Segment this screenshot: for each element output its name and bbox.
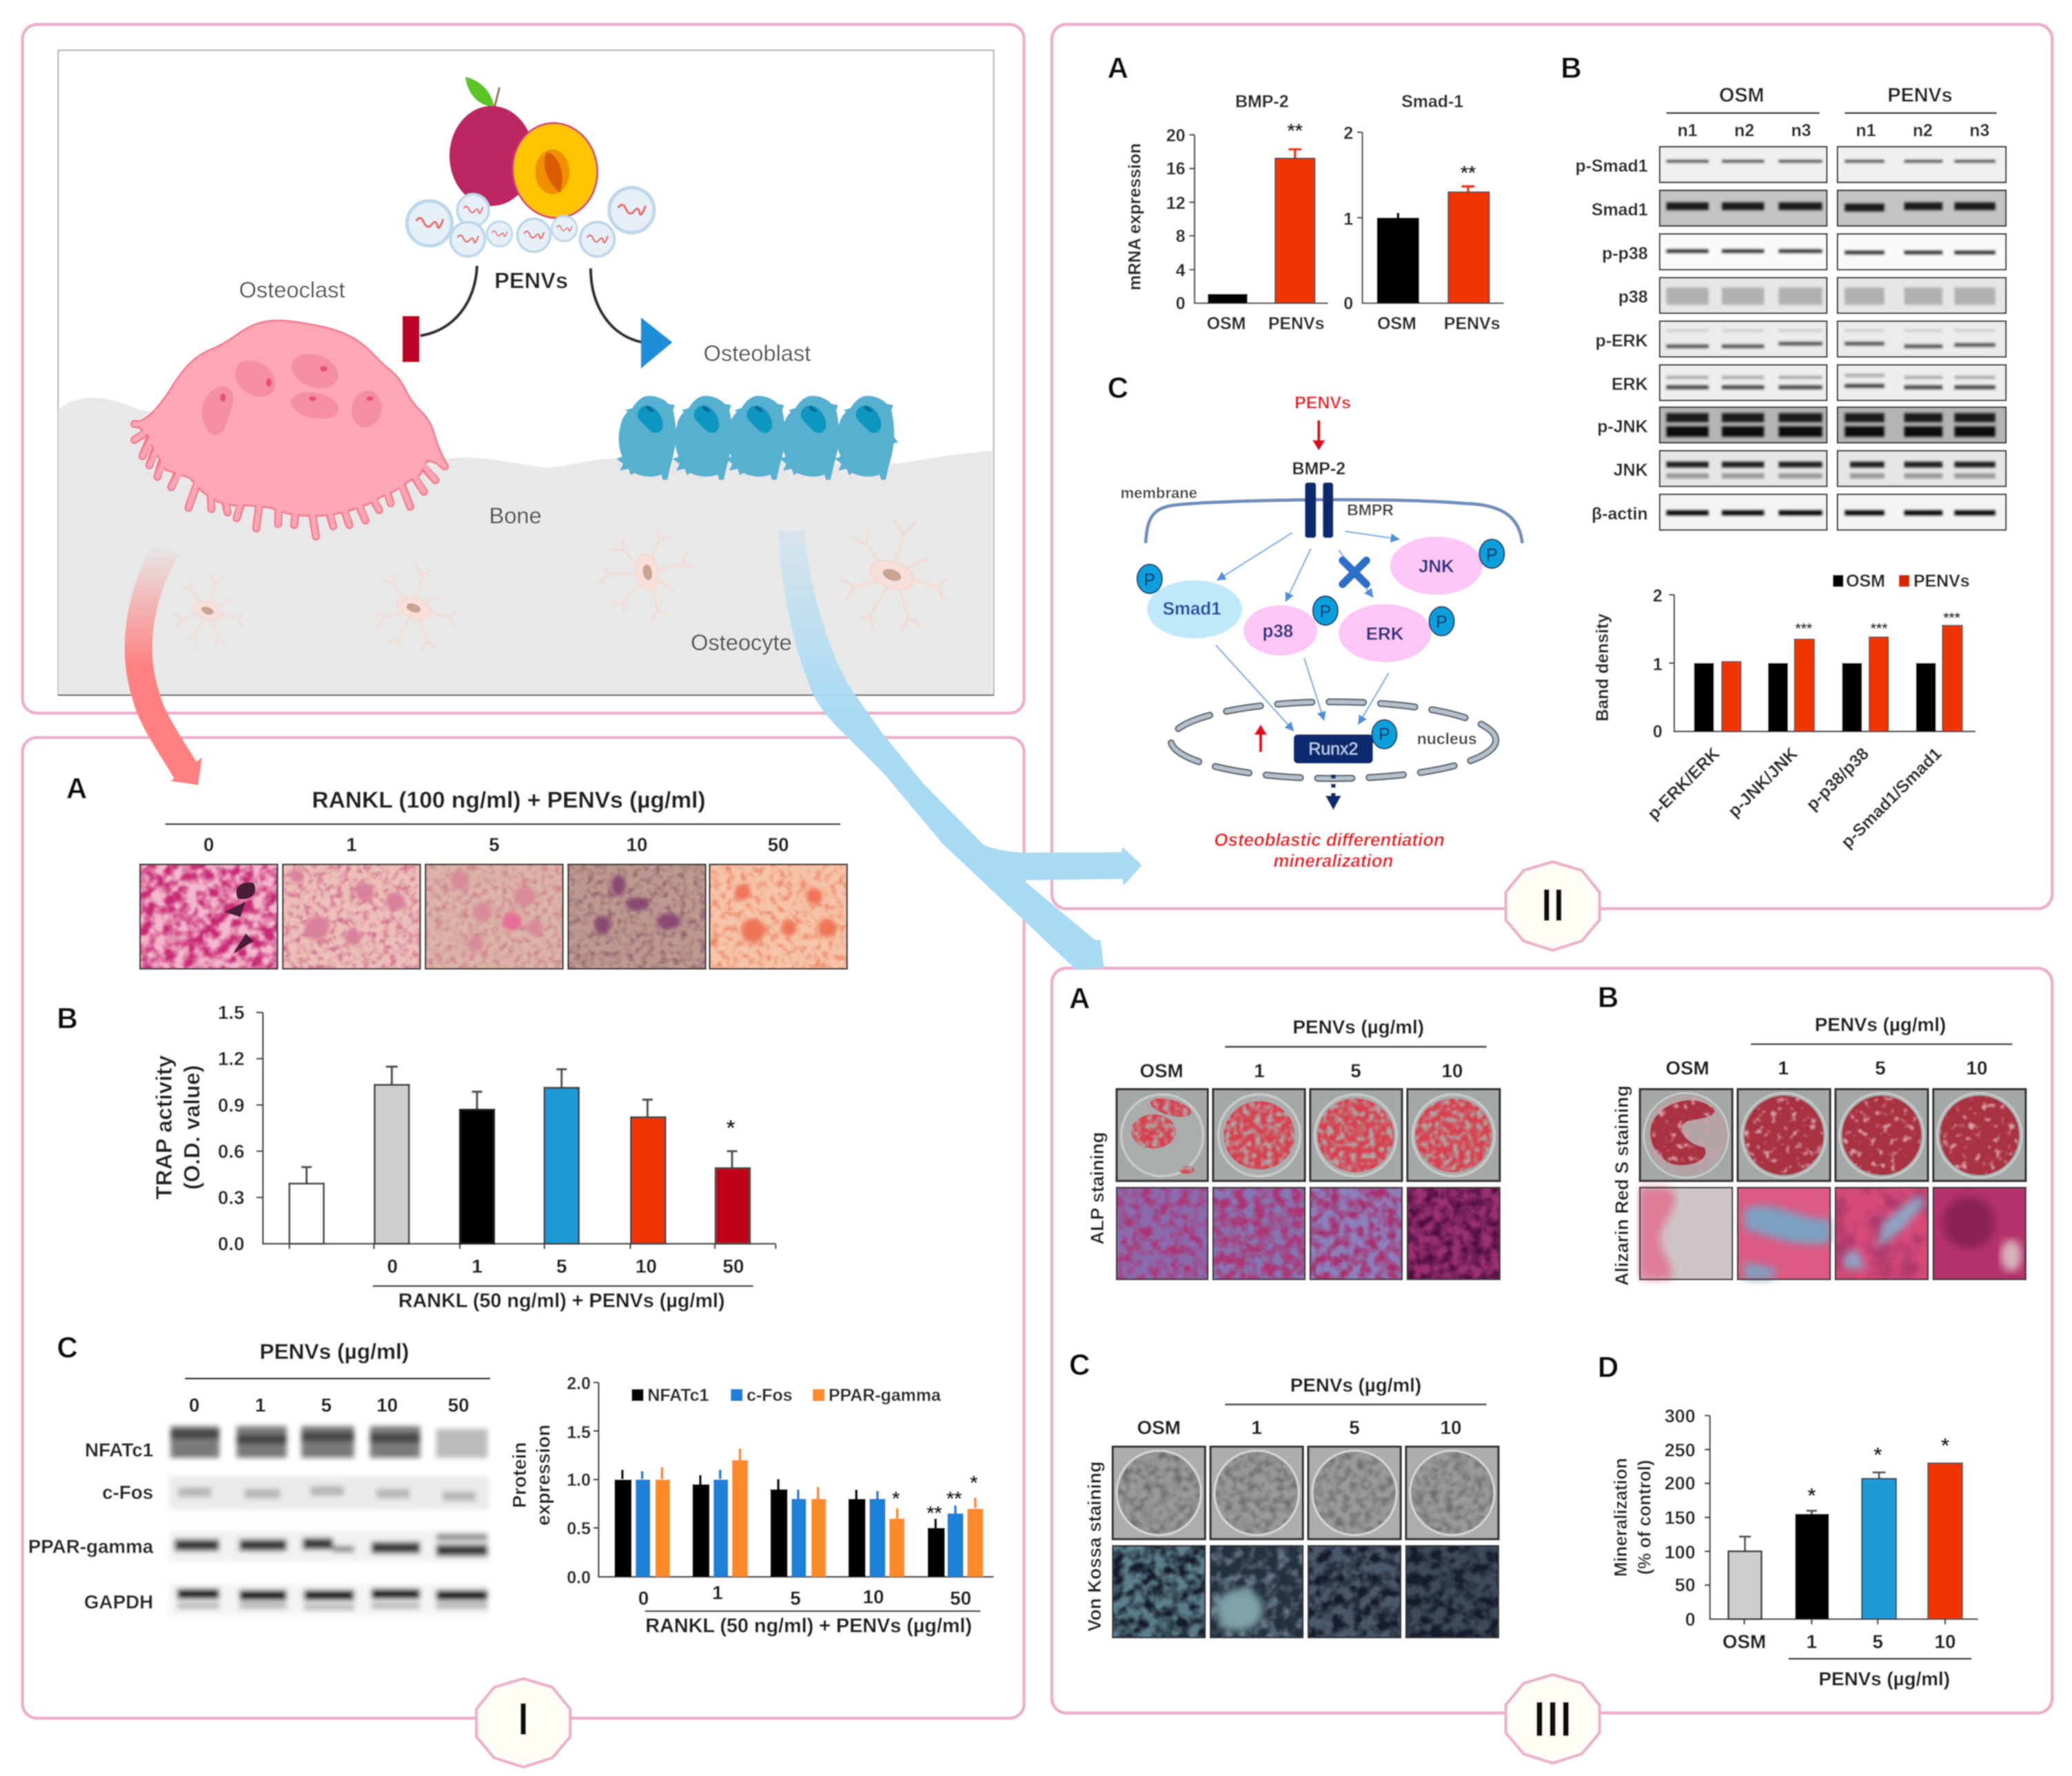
bar chart: band density xyxy=(1593,572,1975,852)
bar chart: Smad-1 mRNA: 0 xyxy=(1343,294,1353,314)
western blot: osteoclast markers: PPAR-gamma xyxy=(28,1536,154,1557)
icon: osteocytes xyxy=(174,514,946,651)
node: p38: P xyxy=(1320,602,1331,621)
bar chart: protein expression: 50 xyxy=(950,1587,971,1608)
western blot: osteoclast markers xyxy=(28,1339,490,1615)
Von Kossa staining: OSM xyxy=(1137,1417,1181,1438)
western blot: signalling proteins: ERK xyxy=(1612,375,1648,394)
node: JNK: JNK xyxy=(1419,557,1454,576)
panel I: osteoclast results xyxy=(23,738,1024,1767)
Von Kossa staining: 10 xyxy=(1441,1417,1461,1438)
western blot: signalling proteins: p-JNK xyxy=(1597,417,1648,436)
western blot: signalling proteins: p-ERK xyxy=(1596,331,1648,350)
TRAP activity bar chart: 0.6 xyxy=(218,1140,245,1162)
bar chart: mineralization: 50 xyxy=(1675,1575,1696,1595)
TRAP activity bar chart: 10 xyxy=(636,1255,657,1277)
TRAP staining heading: RANKL (100 ng/ml) + PENVs (µg/ml) xyxy=(312,787,706,813)
bar chart: band density: p-JNK/JNK xyxy=(1725,744,1801,821)
badge I: I xyxy=(517,1695,529,1744)
scene labels xyxy=(239,268,811,655)
bar chart: mineralization: OSM xyxy=(1723,1631,1766,1653)
PENVs input xyxy=(1294,393,1351,451)
western blot: signalling proteins xyxy=(1575,85,2006,530)
western blot: signalling proteins: p-Smad1 xyxy=(1575,157,1648,176)
Von Kossa staining: PENVs (µg/ml) xyxy=(1290,1375,1421,1396)
western blot: signalling proteins: n3 xyxy=(1969,121,1989,140)
dose labels: 1 xyxy=(346,834,357,856)
TRAP activity bar chart: 5 xyxy=(556,1255,567,1277)
western blot: signalling proteins: OSM xyxy=(1719,85,1764,107)
TRAP activity bar chart: 0.3 xyxy=(218,1187,245,1208)
blocked ERK marker xyxy=(1343,561,1366,584)
ALP staining: 10 xyxy=(1441,1060,1463,1081)
bar chart: Smad-1 mRNA: PENVs xyxy=(1444,314,1500,333)
TRAP activity bar chart: 0.0 xyxy=(218,1233,245,1255)
badge III xyxy=(1506,1675,1600,1763)
TRAP activity bar chart: 0 xyxy=(387,1255,398,1277)
activation arrow to osteoblast xyxy=(591,268,673,369)
node: Smad1: Smad1 xyxy=(1163,599,1221,618)
dose labels: 50 xyxy=(768,834,789,856)
TRAP activity bar chart xyxy=(151,1002,775,1312)
bar chart: band density: *** xyxy=(1943,610,1961,626)
nucleus envelope xyxy=(1171,702,1496,778)
cell membrane: membrane xyxy=(1121,485,1197,502)
label C: C xyxy=(1108,372,1128,404)
TRAP activity bar chart: 0.9 xyxy=(218,1094,245,1116)
Alizarin Red S staining: 5 xyxy=(1875,1058,1886,1079)
western blot: signalling proteins: p-p38 xyxy=(1602,244,1648,263)
bar chart: band density: p-ERK/ERK xyxy=(1644,744,1723,824)
bar chart: band density: 0 xyxy=(1653,723,1663,742)
bar chart: protein expression: Protein xyxy=(509,1442,530,1508)
ALP staining: 5 xyxy=(1350,1060,1361,1081)
badge I xyxy=(476,1679,570,1767)
western blot: signalling proteins: n2 xyxy=(1913,121,1933,140)
bone xyxy=(58,398,993,695)
dotted output arrow xyxy=(1326,774,1341,810)
panel II: osteoblast signalling xyxy=(1052,24,2052,950)
badge III: III xyxy=(1533,1693,1572,1746)
bar chart: BMP-2 mRNA: 4 xyxy=(1176,261,1186,281)
TRAP activity bar chart: 1 xyxy=(471,1255,483,1277)
Von Kossa staining: 1 xyxy=(1251,1417,1262,1438)
bar chart: protein expression: ** xyxy=(946,1489,962,1511)
western blot: signalling proteins: n3 xyxy=(1791,121,1811,140)
legend: PPAR-gamma xyxy=(829,1386,942,1405)
Von Kossa staining: 5 xyxy=(1349,1417,1360,1438)
label A: A xyxy=(1108,52,1128,84)
bar chart: protein expression: * xyxy=(970,1473,978,1495)
Runx2 box: Runx2 xyxy=(1308,740,1358,759)
scene labels: Osteoblast xyxy=(704,340,811,365)
bar chart: Smad-1 mRNA: ** xyxy=(1461,163,1476,185)
bar chart: mineralization: PENVs (µg/ml) xyxy=(1819,1668,1950,1689)
bar chart: mineralization: * xyxy=(1873,1443,1882,1466)
Alizarin Red S staining: 10 xyxy=(1967,1058,1987,1079)
scene bottom edge xyxy=(58,694,994,696)
western blot: osteoclast markers: 5 xyxy=(321,1394,332,1415)
bar chart: mineralization: 10 xyxy=(1935,1631,1956,1653)
bar chart: Smad-1 mRNA: OSM xyxy=(1377,314,1416,333)
bar chart: protein expression: 0.0 xyxy=(567,1568,591,1588)
legend xyxy=(1833,572,1970,591)
bar chart: BMP-2 mRNA: ** xyxy=(1288,120,1303,142)
bar chart: band density: 1 xyxy=(1653,655,1663,674)
bar chart: BMP-2 mRNA: 8 xyxy=(1176,227,1186,246)
label A: A xyxy=(1069,982,1090,1015)
bar chart: BMP-2 mRNA: mRNA expression xyxy=(1125,143,1144,290)
western blot: osteoclast markers: 0 xyxy=(189,1394,200,1415)
western blot: signalling proteins: PENVs xyxy=(1887,85,1953,107)
icon: osteoblast cells xyxy=(616,396,898,480)
bar chart: Smad-1 mRNA: 2 xyxy=(1343,123,1353,143)
western blot: osteoclast markers: 50 xyxy=(448,1394,469,1415)
bar chart: BMP-2 mRNA: PENVs xyxy=(1268,314,1325,333)
western blot: osteoclast markers: PENVs (µg/ml) xyxy=(260,1339,409,1364)
bar chart: band density: 2 xyxy=(1653,586,1663,605)
bar chart: Smad-1 mRNA xyxy=(1343,92,1504,333)
bar chart: protein expression: 10 xyxy=(863,1586,884,1607)
western blot: osteoclast markers: 1 xyxy=(255,1394,265,1415)
ALP staining: PENVs (µg/ml) xyxy=(1293,1016,1424,1038)
label B: B xyxy=(57,1002,78,1034)
label A: A xyxy=(66,772,87,805)
bar chart: BMP-2 mRNA: 16 xyxy=(1166,159,1186,179)
dose labels: 5 xyxy=(489,834,500,856)
western blot: osteoclast markers: 10 xyxy=(376,1394,398,1415)
bar chart: mineralization: 1 xyxy=(1807,1631,1817,1653)
bar chart: protein expression xyxy=(509,1374,994,1637)
western blot: osteoclast markers: c-Fos xyxy=(102,1482,153,1503)
bar chart: mineralization: 300 xyxy=(1665,1406,1696,1426)
node: p38 xyxy=(1243,596,1338,656)
western blot: signalling proteins: Smad1 xyxy=(1592,200,1648,219)
nucleus envelope: nucleus xyxy=(1417,729,1477,747)
Alizarin Red S staining xyxy=(1612,1013,2026,1286)
bar chart: protein expression: 5 xyxy=(790,1587,801,1608)
bar chart: BMP-2 mRNA xyxy=(1125,92,1328,333)
bar chart: mineralization: * xyxy=(1807,1484,1816,1508)
bar chart: protein expression: ** xyxy=(926,1503,942,1525)
dose labels xyxy=(203,834,789,856)
scene labels: Bone xyxy=(489,503,542,528)
label C: C xyxy=(57,1331,78,1364)
TRAP activity bar chart: 1.5 xyxy=(218,1002,245,1023)
bar chart: mineralization: 5 xyxy=(1872,1631,1883,1653)
icon: nanovesicles xyxy=(407,188,654,256)
bar chart: BMP-2 mRNA: 20 xyxy=(1166,126,1186,145)
node: JNK xyxy=(1390,536,1505,595)
TRAP activity bar chart: * xyxy=(727,1115,735,1140)
bar chart: protein expression: 0.5 xyxy=(567,1520,591,1539)
Von Kossa staining xyxy=(1084,1375,1499,1637)
bar chart: mineralization: * xyxy=(1941,1434,1949,1457)
pathway diagram xyxy=(1121,393,1522,871)
TRAP activity bar chart: RANKL (50 ng/ml) + PENVs (µg/ml) xyxy=(398,1290,725,1312)
Runx2 box: P xyxy=(1379,725,1390,745)
bar chart: mineralization xyxy=(1612,1406,1978,1689)
legend xyxy=(631,1386,942,1405)
label B: B xyxy=(1561,52,1582,84)
western blot: signalling proteins: p38 xyxy=(1618,287,1648,307)
label D: D xyxy=(1598,1351,1618,1384)
bar chart: Smad-1 mRNA: 1 xyxy=(1343,210,1353,229)
outcome text: Osteoblastic differentiation xyxy=(1214,831,1445,850)
scene labels: Osteoclast xyxy=(239,276,345,302)
western blot: signalling proteins: n2 xyxy=(1734,121,1754,140)
legend: OSM xyxy=(1846,572,1885,591)
outcome text xyxy=(1214,831,1445,871)
bar chart: BMP-2 mRNA: 0 xyxy=(1176,294,1186,314)
BMPR receptor: BMPR xyxy=(1347,501,1394,519)
BMP-2 ligand: BMP-2 xyxy=(1292,459,1345,478)
legend: PENVs xyxy=(1913,572,1970,591)
bar chart: mineralization: 250 xyxy=(1665,1440,1696,1461)
dose labels: 10 xyxy=(627,834,647,856)
bar chart: mineralization: 100 xyxy=(1665,1542,1696,1562)
bar chart: BMP-2 mRNA: BMP-2 xyxy=(1235,92,1289,111)
cell membrane xyxy=(1121,485,1522,543)
scene frame xyxy=(58,50,994,695)
outcome text: mineralization xyxy=(1273,852,1393,871)
TRAP activity bar chart: TRAP activity xyxy=(151,1056,176,1200)
bar chart: protein expression: 0 xyxy=(638,1587,649,1608)
Alizarin Red S staining: 1 xyxy=(1778,1058,1789,1079)
bar chart: mineralization: (% of control) xyxy=(1635,1460,1654,1575)
bar chart: mineralization: Mineralization xyxy=(1612,1458,1631,1577)
node: Smad1 xyxy=(1137,565,1242,638)
Alizarin Red S staining: Alizarin Red S staining xyxy=(1612,1085,1632,1286)
panel III: mineralization results xyxy=(1052,968,2052,1763)
dose labels: 0 xyxy=(203,834,214,856)
legend: c-Fos xyxy=(746,1386,793,1405)
Runx2 box xyxy=(1294,720,1397,763)
inhibition arrow to osteoclast xyxy=(403,265,477,362)
Alizarin Red S staining: PENVs (µg/ml) xyxy=(1815,1013,1946,1035)
ALP staining: 1 xyxy=(1254,1060,1265,1081)
bar chart: protein expression: RANKL (50 ng/ml) + PENVs (µg/ml) xyxy=(645,1615,972,1637)
western blot: signalling proteins: β-actin xyxy=(1592,504,1648,523)
scene labels: PENVs xyxy=(494,268,568,293)
bar chart: protein expression: 1.0 xyxy=(567,1471,591,1490)
ALP staining: OSM xyxy=(1139,1060,1184,1081)
PENVs input: PENVs xyxy=(1294,393,1351,412)
Von Kossa staining: Von Kossa staining xyxy=(1084,1462,1105,1631)
label C: C xyxy=(1069,1349,1090,1381)
badge II xyxy=(1506,862,1600,950)
bar chart: protein expression: expression xyxy=(533,1424,554,1526)
node: ERK: ERK xyxy=(1366,625,1404,644)
red up arrow xyxy=(1254,725,1267,752)
node: p38: p38 xyxy=(1263,622,1293,641)
badge II: II xyxy=(1541,881,1565,929)
node: JNK: P xyxy=(1486,545,1498,565)
TRAP activity bar chart: 50 xyxy=(723,1255,744,1277)
legend: NFATc1 xyxy=(647,1386,709,1405)
label B: B xyxy=(1598,981,1618,1013)
bar chart: mineralization: 0 xyxy=(1685,1609,1696,1630)
bar chart: BMP-2 mRNA: OSM xyxy=(1207,314,1246,333)
ALP staining: ALP staining xyxy=(1087,1132,1108,1244)
Alizarin Red S staining: OSM xyxy=(1665,1058,1709,1079)
bar chart: band density: *** xyxy=(1871,620,1888,636)
bar chart: band density: Band density xyxy=(1593,614,1612,721)
western blot: signalling proteins: n1 xyxy=(1678,121,1698,140)
western blot: signalling proteins: n1 xyxy=(1856,121,1876,140)
bar chart: band density: p-Smad1/Smad1 xyxy=(1838,744,1945,852)
bar chart: mineralization: 150 xyxy=(1665,1507,1696,1528)
arrow: red flow from osteoclast to panel I xyxy=(139,547,202,785)
bar chart: Smad-1 mRNA: Smad-1 xyxy=(1401,92,1463,111)
bar chart: band density: *** xyxy=(1796,620,1813,636)
bar chart: mineralization: 200 xyxy=(1665,1473,1696,1494)
bar chart: protein expression: 1.5 xyxy=(567,1423,591,1442)
ALP staining xyxy=(1087,1016,1500,1280)
western blot: osteoclast markers: NFATc1 xyxy=(85,1440,153,1461)
bar chart: protein expression: 2.0 xyxy=(567,1374,591,1393)
TRAP micrographs xyxy=(140,865,847,969)
panel: PENVs overview scene xyxy=(23,24,1024,713)
TRAP activity bar chart: 1.2 xyxy=(218,1048,245,1069)
western blot: osteoclast markers: GAPDH xyxy=(84,1591,153,1613)
BMPR receptor xyxy=(1305,483,1394,538)
signalling arrows xyxy=(1216,532,1399,731)
node: Smad1: P xyxy=(1144,570,1155,589)
bar chart: band density: p-p38/p38 xyxy=(1802,744,1873,814)
bar chart: protein expression: 1 xyxy=(712,1582,723,1604)
bar chart: protein expression: * xyxy=(892,1489,900,1511)
node: ERK xyxy=(1339,604,1454,662)
icon: plum fruit xyxy=(449,77,604,223)
arrow: blue flow from osteoblast to panels II and III xyxy=(778,532,1142,970)
node: ERK: P xyxy=(1436,613,1448,632)
scene labels: Osteocyte xyxy=(691,629,792,655)
western blot: signalling proteins: JNK xyxy=(1614,461,1648,480)
icon: osteoclast cell xyxy=(133,321,448,536)
TRAP activity bar chart: (O.D. value) xyxy=(179,1065,204,1190)
bar chart: BMP-2 mRNA: 12 xyxy=(1166,194,1186,213)
